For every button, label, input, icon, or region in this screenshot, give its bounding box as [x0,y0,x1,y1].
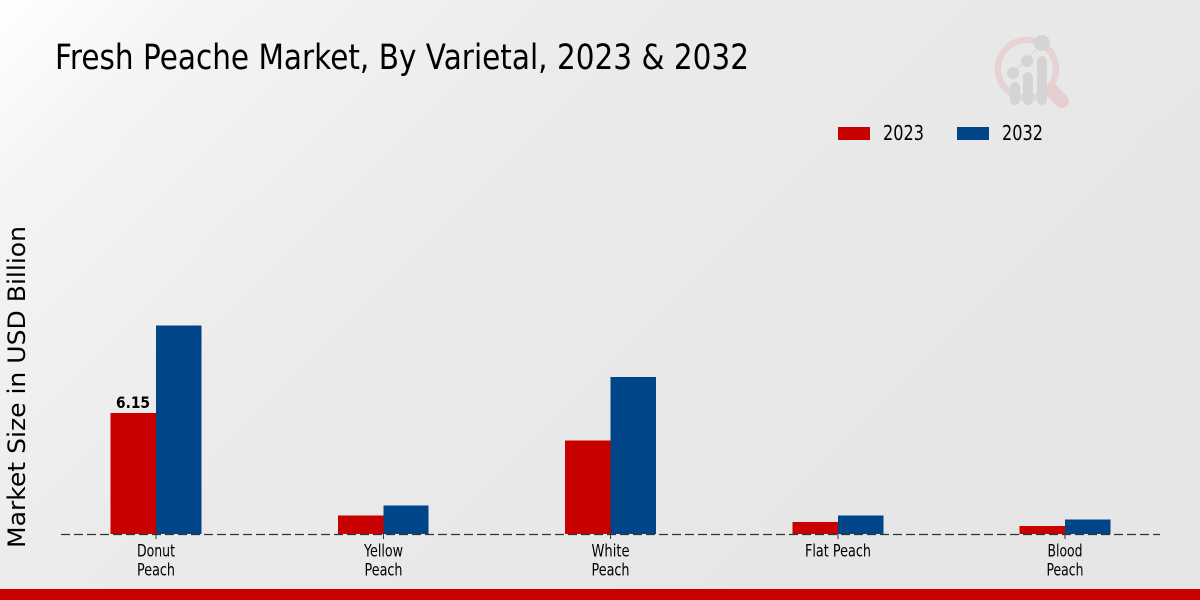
category label: Flat Peach: Flat Peach [805,540,871,560]
watermark logo icon [998,35,1062,105]
category label: Blood Peach: Peach [1046,560,1084,580]
legend item: 2023: 2023 [883,121,924,145]
bars: White Peach [565,377,656,534]
category label: Donut Peach: Donut [137,540,175,560]
category label: White Peach: White [592,540,630,560]
legend item: 2032 [957,121,1043,145]
legend item: 2023 [838,121,924,145]
category label: Donut Peach: Peach [137,560,175,580]
title: Fresh Peache Market, By Varietal, 2023 & 2032 [55,38,749,78]
bars: Yellow Peach [338,506,428,534]
bars: Flat Peach [792,516,884,534]
bottom red band [0,589,1200,600]
data label: 6.15: 6.15 [116,393,150,412]
category label: Yellow Peach: Yellow [363,540,403,560]
bars: Blood Peach [1020,520,1110,534]
legend [838,121,1043,145]
category label: Yellow Peach: Peach [364,560,402,580]
bars: Donut Peach [110,326,202,534]
x-axis baseline [61,534,1160,539]
y-axis title: Market Size in USD Billion [3,226,31,548]
category label: White Peach: Peach [592,560,630,580]
bar chart [61,326,1160,580]
category label: Blood Peach: Blood [1048,540,1082,560]
legend item: 2032: 2032 [1002,121,1043,145]
